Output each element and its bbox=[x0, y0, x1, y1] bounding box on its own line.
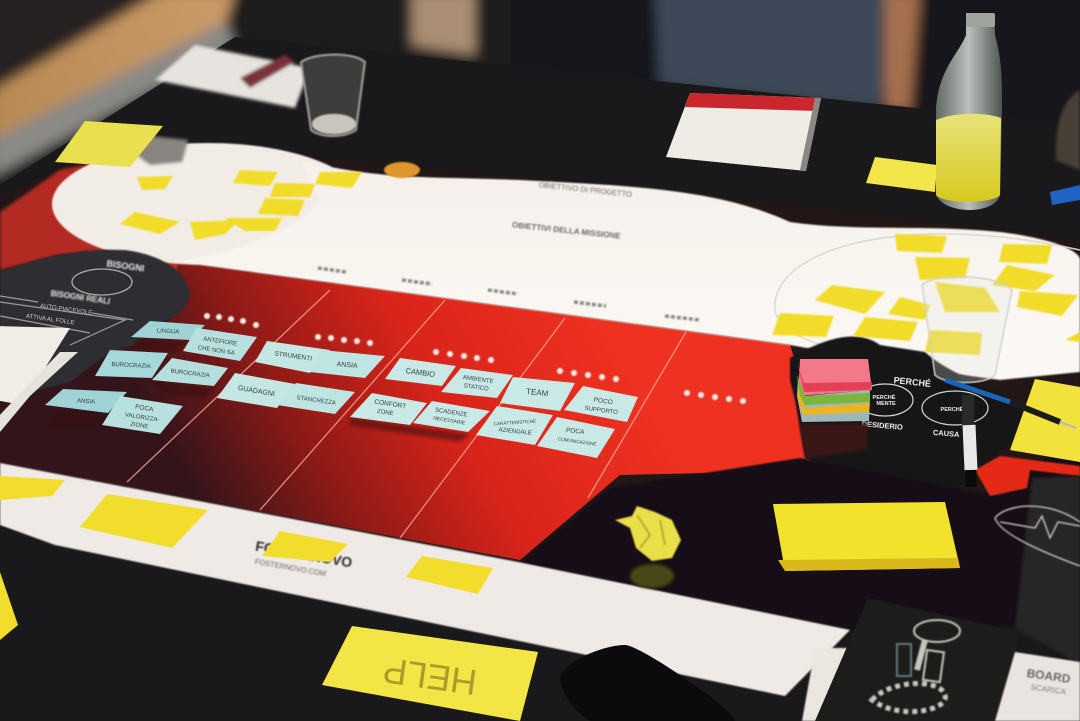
brown object right edge bbox=[1056, 90, 1080, 170]
HELP note: HELP bbox=[381, 650, 479, 703]
strip logo: FOSTERNOVO.COM bbox=[254, 557, 327, 578]
note bbox=[413, 401, 490, 432]
note: ANTEFIORE bbox=[203, 336, 238, 348]
note bbox=[537, 417, 615, 458]
note bbox=[95, 350, 168, 378]
background room bbox=[0, 0, 1080, 190]
note bbox=[310, 350, 385, 378]
note: ANSIA bbox=[77, 398, 95, 406]
left circle bbox=[52, 143, 364, 265]
note: ANSIA bbox=[336, 361, 358, 370]
note: SCADENZE bbox=[435, 407, 468, 419]
note: table top-right bbox=[866, 157, 937, 192]
central band and right circle bbox=[178, 160, 1080, 380]
note: LINGUA bbox=[157, 328, 179, 336]
coloured note stack bbox=[797, 359, 872, 422]
note: ZIONE bbox=[130, 422, 149, 430]
note: CARATTERISTICHE bbox=[493, 419, 536, 426]
note: POCO bbox=[593, 397, 613, 406]
label: perche: PERCHÉ bbox=[893, 375, 931, 389]
HELP note bbox=[322, 626, 538, 721]
note bbox=[102, 396, 183, 434]
water bottle bbox=[936, 13, 1002, 210]
crumpled paper bbox=[615, 506, 681, 561]
heading: obiettivo: OBIETTIVO DI PROGETTO bbox=[538, 180, 632, 199]
note: NECESSARIE bbox=[433, 416, 466, 427]
note bbox=[152, 358, 228, 386]
black lower-right area bbox=[518, 448, 1080, 668]
black card bbox=[815, 598, 1020, 721]
notebook on table bbox=[666, 93, 821, 171]
band headings bbox=[512, 180, 632, 241]
yellow sticky notes bbox=[0, 121, 1080, 640]
note bbox=[564, 386, 638, 422]
note: TEAM bbox=[526, 387, 549, 398]
priority dots bbox=[204, 313, 746, 404]
notes: left circle bbox=[120, 170, 362, 240]
crumpled paper reflection bbox=[630, 564, 674, 588]
heading: obiettivi della missione: OBIETTIVI DELLA MISSIONE bbox=[512, 220, 622, 241]
board card: SCARICA bbox=[1030, 683, 1067, 697]
icon: lightbulb illustration bbox=[872, 620, 960, 712]
bottom white strip bbox=[0, 463, 850, 696]
right circle outline bbox=[775, 234, 1080, 375]
papers on table bbox=[155, 45, 310, 108]
right head silhouette: CAUSA bbox=[933, 428, 960, 439]
note: POCA bbox=[566, 427, 585, 436]
note: BUROCRAZIA bbox=[170, 369, 210, 379]
right head silhouette bbox=[790, 336, 1023, 490]
note: CHE NON SA bbox=[197, 345, 235, 357]
left head silhouette: AUTO-PIACEVOLE bbox=[40, 303, 93, 317]
note: ZONE bbox=[376, 409, 394, 417]
icon: heart line bbox=[995, 506, 1080, 566]
receipt paper bbox=[802, 648, 848, 721]
note shadows bbox=[50, 340, 470, 442]
label: bisogni: BISOGNI bbox=[106, 258, 145, 274]
right head silhouette: DESIDERIO bbox=[861, 419, 903, 432]
glass on right bbox=[922, 277, 1012, 382]
left head silhouette: ATTIVA AL FOLLE bbox=[25, 314, 75, 326]
note bbox=[476, 406, 553, 445]
notes: strip bbox=[0, 476, 493, 640]
orange blob bbox=[384, 162, 420, 178]
poster: top-left red edge bbox=[0, 155, 200, 275]
note bbox=[350, 393, 427, 425]
note bbox=[131, 321, 205, 340]
blue sticky notes bbox=[45, 321, 638, 458]
poster: dark backing bbox=[0, 138, 1080, 695]
note: table top-left bbox=[55, 121, 163, 167]
note bbox=[441, 368, 513, 398]
doodle above left circle bbox=[130, 136, 188, 165]
right head silhouette: PERCHÉ bbox=[941, 405, 964, 413]
note: COMUNICAZIONE bbox=[558, 436, 597, 447]
poster: red main field bbox=[0, 262, 830, 560]
band scale dots bbox=[318, 268, 700, 320]
notes: right circle bbox=[772, 234, 1080, 355]
right-side grey panel bbox=[1015, 476, 1080, 665]
red patch bbox=[975, 456, 1080, 496]
board card bbox=[995, 652, 1080, 721]
note: CAMBIO bbox=[405, 366, 436, 379]
note bbox=[183, 328, 257, 361]
note: AMBIENTE bbox=[463, 375, 494, 385]
note: POCA bbox=[135, 404, 155, 414]
phone bbox=[560, 645, 735, 721]
note bbox=[45, 389, 127, 413]
blue pen bbox=[945, 380, 1076, 428]
note bbox=[277, 383, 355, 414]
note: STANCHEZZA bbox=[296, 395, 336, 407]
glass on table bbox=[301, 54, 365, 136]
right head silhouette: MENTE bbox=[876, 401, 896, 407]
yellow pad bbox=[773, 502, 960, 571]
left head silhouette: BISOGNI REALI bbox=[50, 289, 111, 306]
note: STATICO bbox=[463, 383, 489, 393]
note: GUADAGNI bbox=[237, 385, 275, 398]
note: STRUMENTI bbox=[274, 350, 313, 363]
poster: white band with circles bbox=[52, 143, 1080, 380]
note bbox=[385, 358, 456, 386]
note: CONFORT bbox=[374, 399, 407, 410]
note: SUPPORTO bbox=[584, 406, 618, 416]
left head silhouette bbox=[0, 250, 190, 400]
marker bbox=[968, 395, 971, 487]
note: VALORIZZA- bbox=[124, 412, 160, 424]
stack reflection bbox=[800, 424, 868, 458]
right head silhouette: PERCHÉ bbox=[873, 393, 896, 401]
column lines bbox=[127, 290, 686, 538]
board card: BOARD bbox=[1026, 666, 1072, 686]
note: right edge bbox=[1010, 379, 1080, 462]
note bbox=[500, 377, 575, 411]
note bbox=[217, 373, 295, 408]
note: AZIENDALE bbox=[498, 427, 532, 437]
note bbox=[255, 341, 330, 373]
note: BUROCRAZIA bbox=[111, 362, 151, 370]
strip logo: FOSTERNOVO bbox=[254, 538, 354, 570]
blue object right edge bbox=[1050, 185, 1080, 205]
paper stack left bbox=[0, 326, 78, 438]
